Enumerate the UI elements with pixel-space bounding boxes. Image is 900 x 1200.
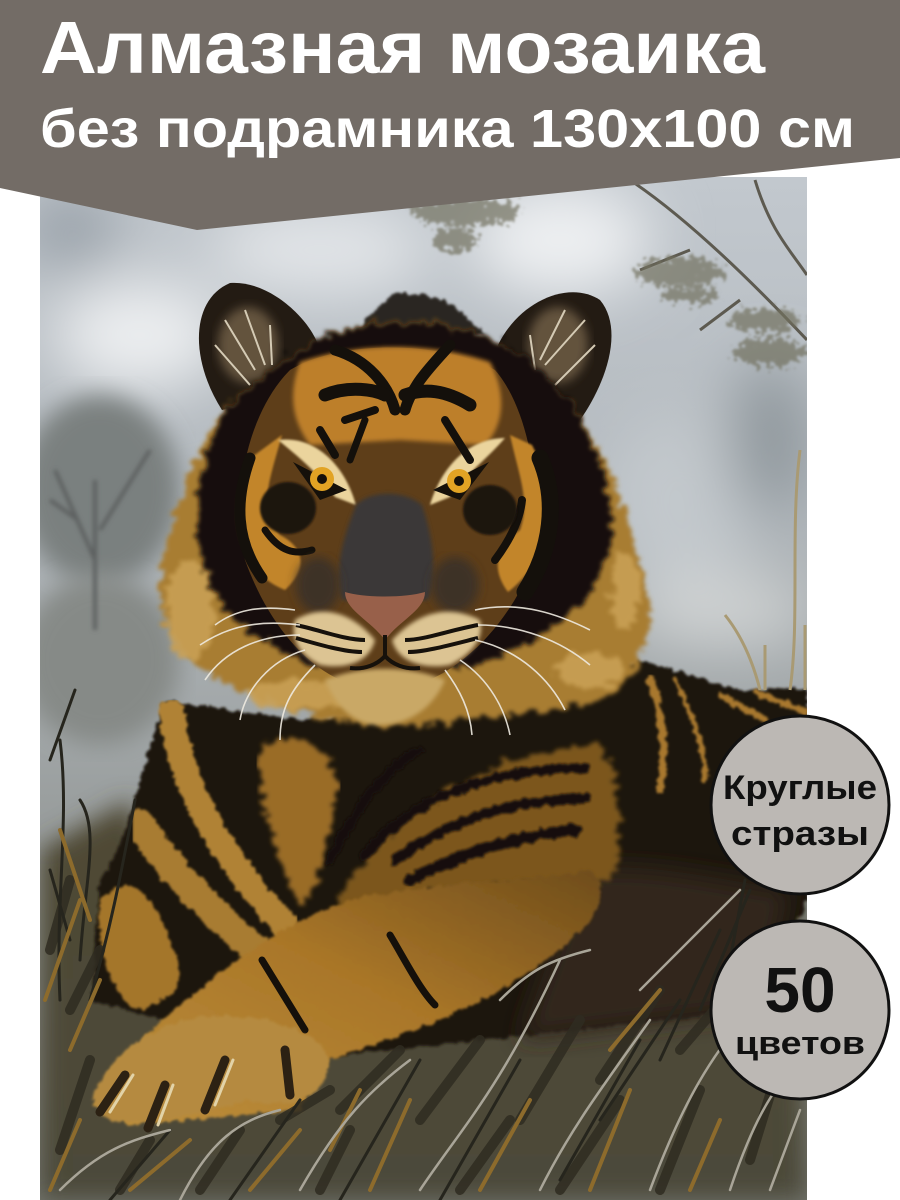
left eye [293,462,347,500]
tiger head [159,283,649,740]
left shoulder stripes [140,712,290,950]
left haunch [99,886,180,1010]
crest [355,292,485,335]
illustration: tiger lying in grass [20,177,810,1200]
mouth [350,635,420,668]
dry stalks right [725,450,805,690]
left ear [199,283,318,410]
sky [40,177,807,1200]
nose [345,592,425,640]
right body stripes [650,680,805,790]
tiger body [92,660,807,1128]
torso [92,660,807,1060]
muzzle sides [296,557,479,613]
paw [92,1015,329,1122]
muzzle stripes [296,625,478,652]
forehead black stripes [240,345,550,592]
cream brows [278,438,505,505]
badge: 50 colours: цветов [735,1025,865,1061]
tree foliage [410,198,806,366]
title: Алмазная мозаика [40,6,766,89]
dark grass blades [50,690,750,1200]
badge: 50 colours [711,921,889,1099]
face base [240,348,536,690]
claws [100,1050,290,1128]
flank orange fur [335,745,620,915]
lower flank shading [520,867,790,1040]
leg stripes [262,935,435,1030]
dense grass shadow [50,880,790,1190]
golden grass blades [45,830,800,1190]
badge: 50 colours: 50 [764,954,836,1026]
right eye [433,462,489,500]
forehead orange [293,347,501,445]
mane gold [159,322,649,726]
badge: round rhinestones: стразы [731,815,869,853]
foreground grass [45,690,800,1200]
right ear [498,292,611,420]
whisker pads [294,612,481,725]
misty trees left [20,395,180,745]
foreleg [92,870,601,1125]
chest fur [261,739,336,905]
subtitle: без подрамника 130х100 см [40,99,855,159]
mane dark ring [197,322,612,672]
whiskers [200,607,590,740]
badge: round rhinestones [711,716,889,894]
eye patches [260,482,517,535]
header banner [0,0,900,230]
tree branches top right [630,180,807,340]
clouds [20,185,810,645]
cheek orange patches [236,435,549,592]
mane highlights [166,552,639,710]
pale grass blades [60,890,800,1200]
badge: round rhinestones: Круглые [723,769,877,807]
nose bridge [339,494,433,600]
ground grass base [40,800,807,1200]
flank black stripes [330,750,585,880]
